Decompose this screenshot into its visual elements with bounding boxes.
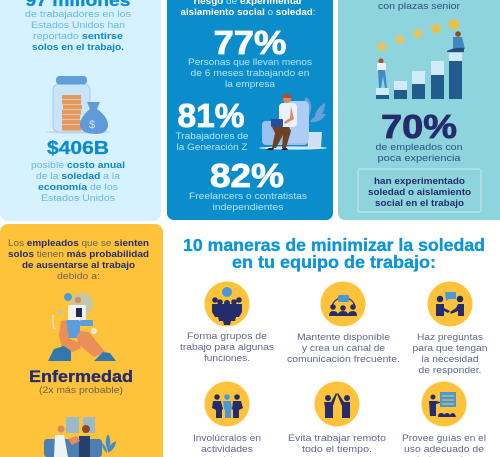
text: new employees: la empresa (225, 79, 275, 89)
text: new employees: de 6 meses trabajando en (190, 68, 310, 78)
text: workers report loneliness: solos en el trabajo. (32, 42, 124, 52)
icon: presenter with board (422, 382, 466, 426)
icon: coin jar and money bag: $ (89, 119, 95, 131)
bar chart: growing steps (376, 53, 462, 99)
text: annual cost: Estados Unidos (41, 193, 116, 203)
callout: experienced loneliness (358, 169, 481, 212)
text: tip 5: Evita trabajar remoto (288, 433, 386, 443)
text: new employees: Personas que llevan menos (188, 57, 313, 67)
text: absenteeism intro: debido a: (57, 271, 100, 281)
stat: 77%: 77% (214, 24, 286, 61)
tip: provide guides (402, 382, 486, 457)
text: tip 5: todo el tiempo. (302, 444, 372, 454)
tip: work groups (180, 282, 275, 363)
icon: high five (314, 382, 360, 426)
callout: experienced loneliness: social en el trabajo (375, 198, 465, 208)
icon: meeting with chat (320, 282, 366, 326)
icon: doctor visit on sofa (44, 417, 116, 457)
tip: stay available (287, 282, 400, 364)
icon: two people talking (428, 282, 472, 326)
text: workers report loneliness (25, 9, 132, 52)
text: freelancers: Freelancers o contratistas (189, 191, 308, 201)
text: absenteeism intro: de ausentarse al trabajo (22, 260, 136, 270)
tip: involve them (193, 382, 261, 457)
text: tip 2 (287, 332, 400, 364)
heading: 10 ways: en tu equipo de trabajo: (232, 252, 436, 272)
text: tip 2: comunicación frecuente. (287, 354, 400, 364)
text: senior positions: con plazas senior (378, 1, 460, 11)
text: twice as likely: (2x más probable) (39, 385, 123, 395)
text: generation Z: Trabajadores de (176, 131, 248, 141)
text: tip 6 (402, 433, 486, 457)
callout: experienced loneliness: han experimentado (374, 176, 466, 186)
text: freelancers: independientes (212, 202, 284, 212)
icon: stars (376, 17, 461, 52)
text: tip 1: Forma grupos de (187, 331, 267, 341)
text: annual cost: de la soledad a la (36, 171, 120, 181)
tip: avoid remote (288, 382, 386, 454)
text: tip 3: de responder. (418, 365, 482, 375)
text: workers report loneliness: reportado sentirse (33, 31, 123, 41)
heading: 10 ways (183, 235, 485, 272)
stat: 82%: 82% (210, 157, 284, 194)
panel: 97 million workers (0, 0, 161, 221)
text: freelancers (189, 191, 308, 212)
text: absenteeism intro: Los empleados que se sienten (8, 238, 149, 248)
text: generation Z (176, 131, 248, 152)
stat: $406B: $406B (47, 138, 109, 158)
panel: absenteeism (0, 224, 163, 457)
text: workers report loneliness: de trabajadores en los (25, 9, 132, 19)
text: tip 5 (288, 433, 386, 454)
text: absenteeism intro: solos tienen más probabilidad (8, 249, 149, 259)
icon: person sitting (447, 31, 465, 52)
text: absenteeism intro (8, 238, 149, 281)
text: tip 2: y crea un canal de (302, 343, 385, 353)
heading: 10 ways: 10 maneras de minimizar la soledad (183, 235, 485, 255)
tip: ask questions (412, 282, 488, 375)
icon: hands holding phone with doctor (48, 293, 116, 361)
text: tip 1 (180, 331, 275, 363)
text: annual cost (31, 160, 125, 203)
panel: groups at risk (167, 0, 333, 220)
text: new employees (188, 57, 313, 89)
text: tip 1: funciones. (204, 353, 250, 363)
stat: Enfermedad: Enfermedad (29, 367, 133, 386)
icon: coin jar and money bag (45, 76, 111, 134)
text: tip 4: actividades (201, 444, 254, 454)
text: tip 3: Haz preguntas (417, 332, 484, 342)
text: annual cost: economía de los (38, 182, 119, 192)
icon: person standing (377, 58, 387, 88)
text: risk intro (180, 0, 316, 17)
text: tip 4: Involúcralos en (193, 433, 261, 443)
text: low experience: de empleados con (376, 142, 462, 152)
text: tip 6: uso adecuado de (404, 444, 484, 454)
icon: three people together (204, 382, 250, 426)
text: tip 6: Provee guías en el (402, 433, 486, 443)
text: annual cost: posible costo anual (31, 160, 125, 170)
text: generation Z: la Generación Z (176, 142, 248, 152)
text: tip 2: Mantente disponible (297, 332, 390, 342)
callout: experienced loneliness: soledad o aislamiento (368, 187, 472, 197)
stat: 81%: 81% (178, 97, 244, 134)
text: risk intro: aislamiento social o soledad : (180, 7, 316, 17)
text: tip 1: trabajo para algunas (180, 342, 275, 352)
icon: team group (204, 282, 250, 326)
panel: junior employees (338, 0, 500, 220)
text: tip 3: para que tengan (412, 343, 488, 353)
text: workers report loneliness: Estados Unidos han (31, 20, 125, 30)
text: tip 3 (412, 332, 488, 375)
text: low experience: poca experiencia (378, 153, 460, 163)
icon: person with laptop in armchair (259, 94, 327, 150)
text: tip 4 (193, 433, 261, 457)
stat: 70%: 70% (381, 108, 457, 145)
text: tip 3: la necesidad (422, 354, 478, 364)
text: low experience (376, 142, 462, 163)
